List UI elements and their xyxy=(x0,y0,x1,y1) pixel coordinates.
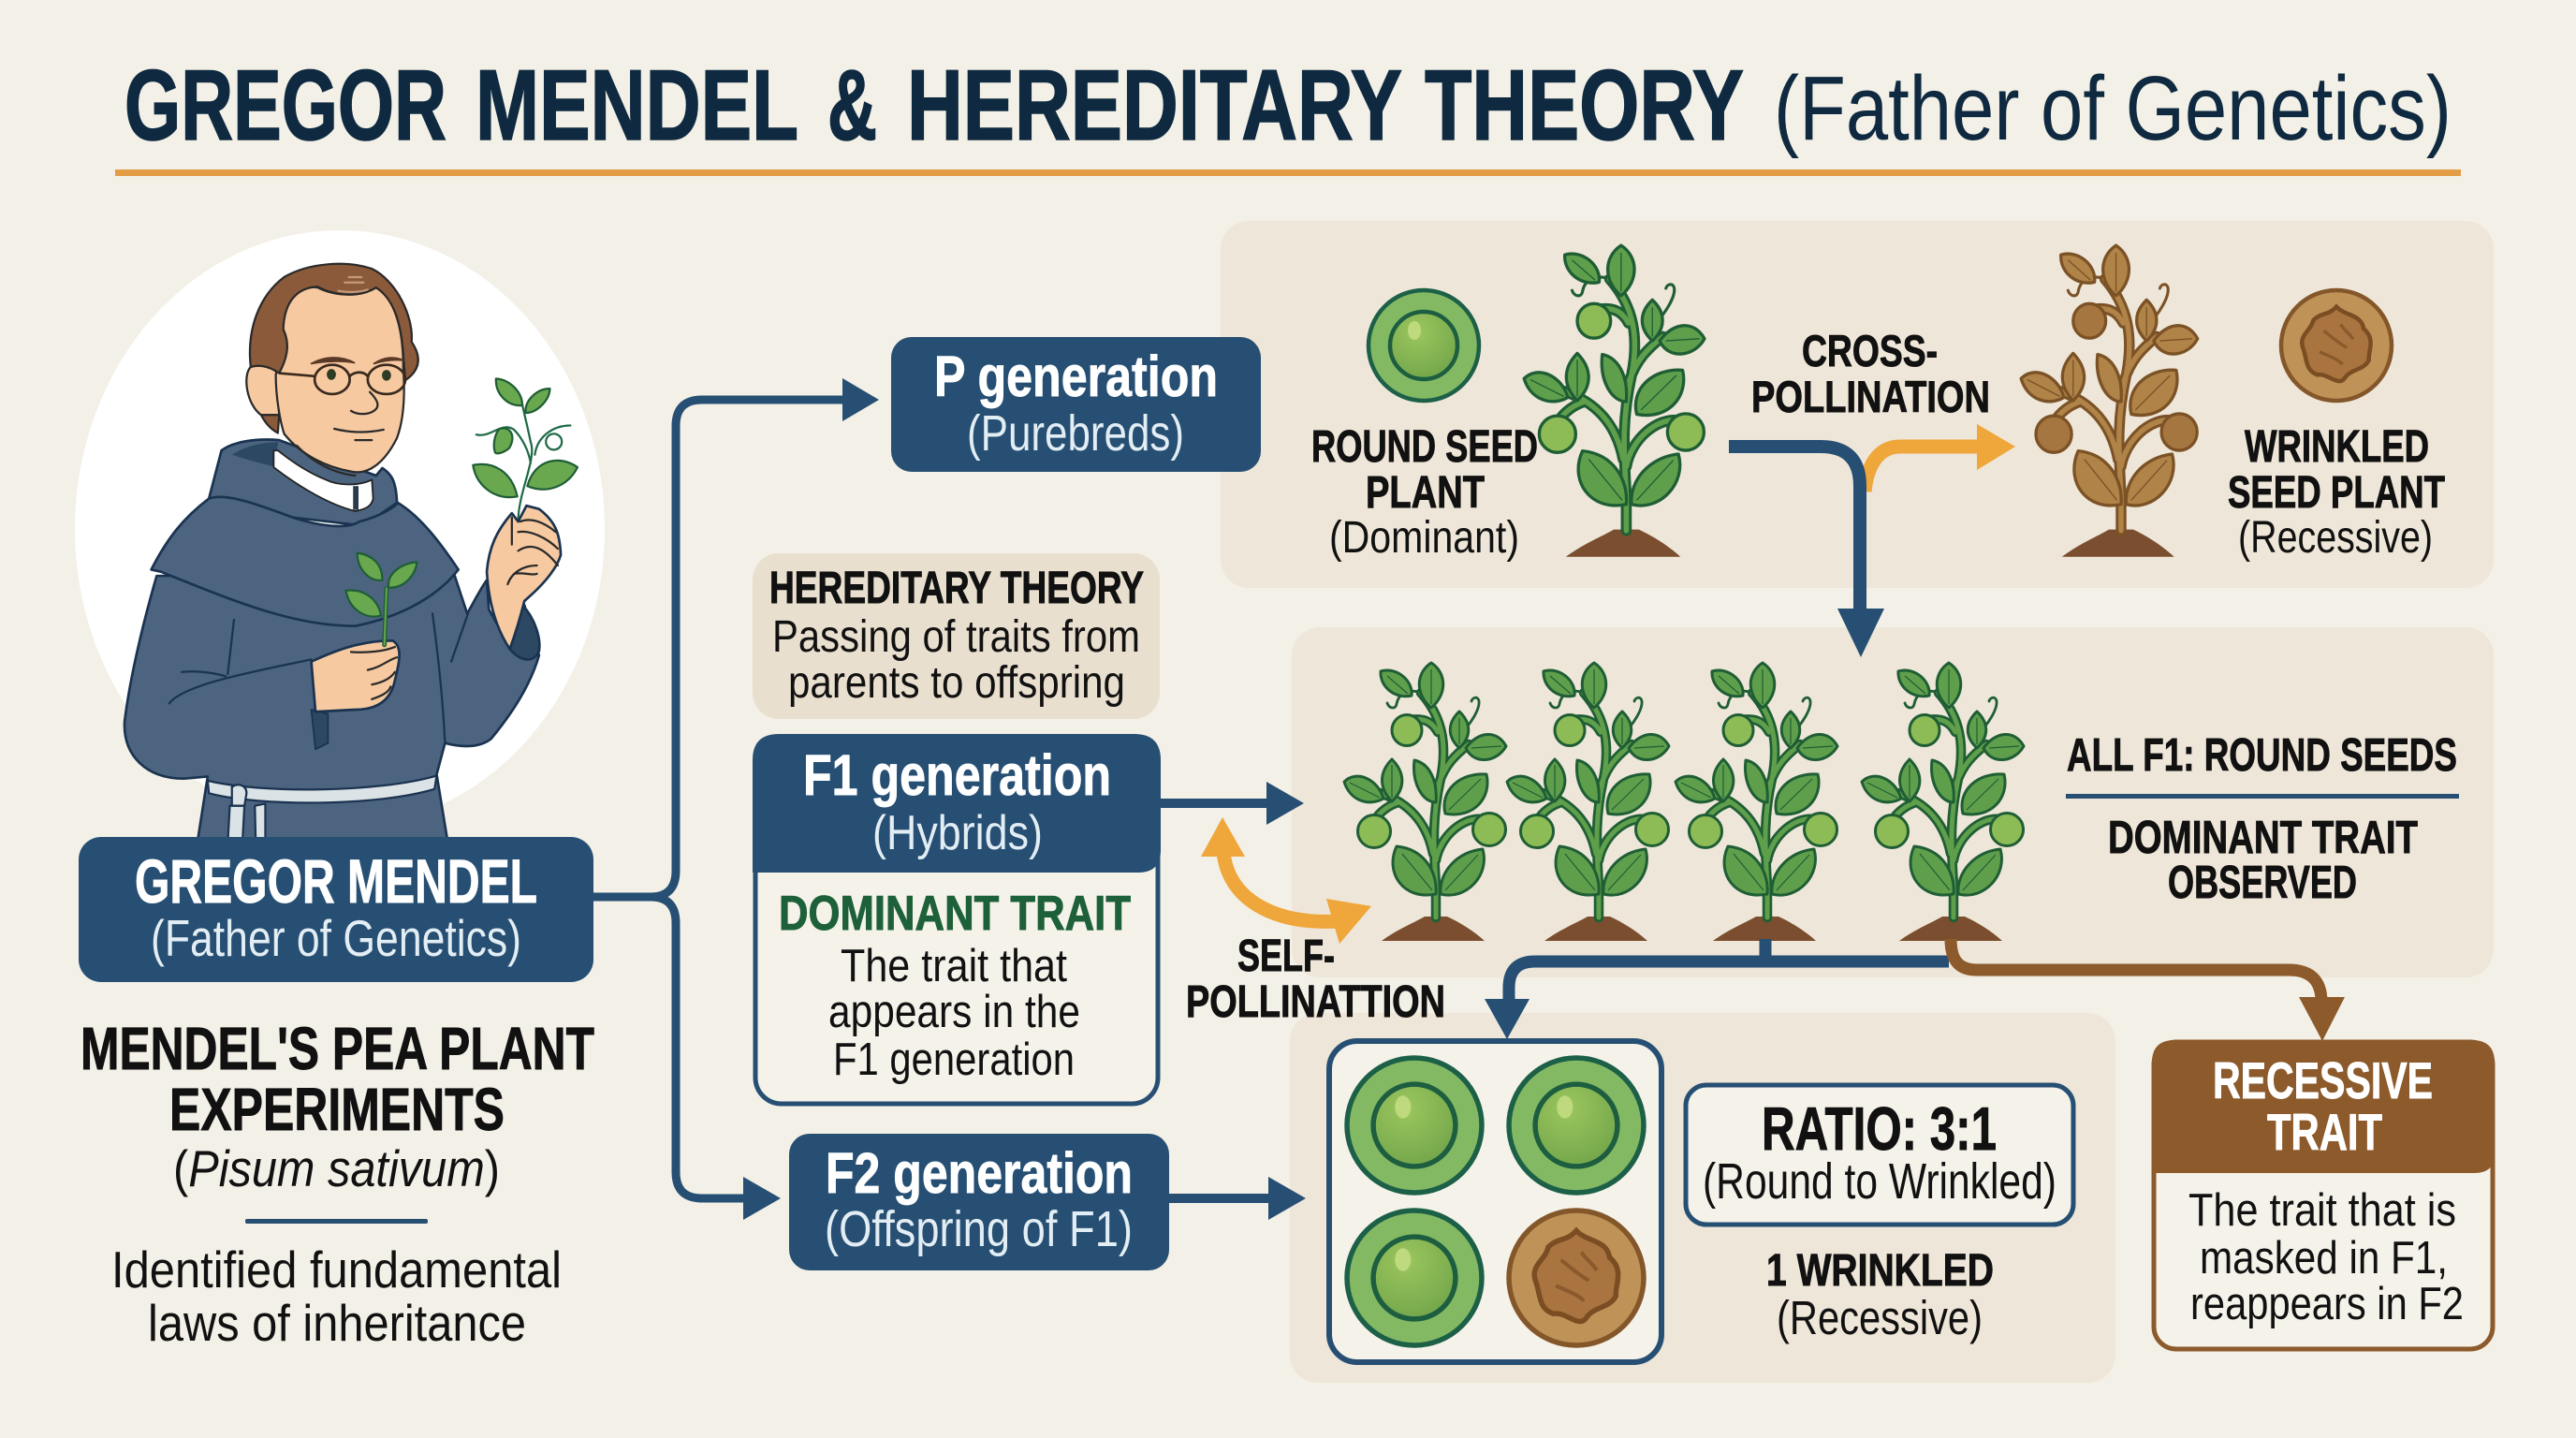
title: (Father of Genetics) xyxy=(1774,57,2452,159)
callout: hereditary theory: HEREDITARY THEORY xyxy=(769,564,1144,613)
icon: F1 plant 1 xyxy=(1344,663,1506,941)
label: cross-pollination xyxy=(1751,326,1990,421)
box: F2 generation: (Offspring of F1) xyxy=(825,1201,1133,1257)
seed grid xyxy=(1329,1041,1661,1362)
icon: F1 plant 2 xyxy=(1507,663,1669,941)
portrait: Gregor Mendel holding pea plants xyxy=(75,230,605,844)
box: F1 generation with dominant trait: The trait that xyxy=(841,941,1067,991)
lower hand xyxy=(312,640,400,712)
box: recessive trait: The trait that is xyxy=(2188,1185,2456,1236)
arrow: F2 generation to seed grid xyxy=(1169,1177,1306,1220)
text: fundamental laws: Identified fundamental xyxy=(111,1240,562,1299)
text: fundamental laws: laws of inheritance xyxy=(148,1294,526,1352)
arrow: cross-pollination orange branch xyxy=(1865,424,2015,492)
belt xyxy=(208,776,436,802)
box: F1 generation with dominant trait: (Hybrids) xyxy=(872,806,1043,860)
arrow: F1 generation to F1 plants xyxy=(1161,782,1304,825)
hair xyxy=(250,264,418,380)
icon: green pea plant xyxy=(1524,245,1705,557)
text: 1 wrinkled recessive: (Recessive) xyxy=(1777,1291,1983,1344)
box: F2 generation xyxy=(789,1134,1169,1270)
arrow: F1 plants to recessive trait xyxy=(1951,939,2345,1041)
label: cross-pollination: POLLINATION xyxy=(1751,372,1990,421)
panel: F1 plants xyxy=(1292,627,2494,977)
label: wrinkled seed plant xyxy=(2228,422,2445,563)
eyes xyxy=(327,369,336,380)
box: recessive trait: reappears in F2 xyxy=(2190,1279,2464,1329)
arrow: parents to F1 plants xyxy=(1729,447,1884,657)
panel: parental cross xyxy=(1221,221,2494,588)
name box: Gregor Mendel: (Father of Genetics) xyxy=(151,909,521,967)
box: F1 generation with dominant trait: F1 generation xyxy=(803,743,1111,807)
face xyxy=(276,287,404,472)
upper sprig xyxy=(473,378,578,521)
label: wrinkled seed plant: (Recessive) xyxy=(2238,513,2433,563)
label: wrinkled seed plant: SEED PLANT xyxy=(2228,468,2445,518)
icon: wrinkled seed xyxy=(1509,1211,1644,1345)
box: recessive trait xyxy=(2152,1040,2495,1349)
heading: pea plant experiments: (Pisum sativum) xyxy=(173,1139,500,1197)
label: self-pollination: POLLINATTION xyxy=(1186,977,1445,1027)
label: self-pollination xyxy=(1186,932,1445,1027)
label: round seed plant: (Dominant) xyxy=(1329,513,1519,563)
box: P generation xyxy=(891,337,1261,472)
upper hand xyxy=(487,506,561,649)
title underline xyxy=(115,169,2461,176)
heading: pea plant experiments xyxy=(80,1015,594,1197)
text: all F1 round seeds xyxy=(2066,730,2459,908)
glasses xyxy=(280,365,405,394)
title: MENDEL xyxy=(476,49,798,161)
icon: F1 plant 4 xyxy=(1862,663,2024,941)
ear xyxy=(246,366,279,415)
icon: brown pea plant xyxy=(2021,245,2198,557)
callout: hereditary theory: parents to offspring xyxy=(788,658,1125,708)
label: round seed plant xyxy=(1311,422,1538,563)
box: P generation: (Purebreds) xyxy=(967,405,1184,462)
text: all F1 round seeds: OBSERVED xyxy=(2168,858,2357,908)
box: recessive trait: RECESSIVE xyxy=(2213,1051,2433,1109)
box: F1 generation with dominant trait xyxy=(753,734,1161,1104)
title xyxy=(124,49,2452,161)
icon: round green seed xyxy=(1368,290,1479,401)
label: cross-pollination: CROSS- xyxy=(1802,326,1938,375)
text: all F1 round seeds: DOMINANT TRAIT xyxy=(2108,813,2418,863)
name box: Gregor Mendel xyxy=(79,837,593,982)
text: 1 wrinkled recessive xyxy=(1766,1246,1994,1344)
box: F2 generation: F2 generation xyxy=(826,1141,1133,1205)
ratio callout: (Round to Wrinkled) xyxy=(1703,1153,2056,1210)
title: & xyxy=(827,49,877,161)
brows xyxy=(312,358,403,363)
panel: F2 results xyxy=(1290,1013,2115,1383)
box: F1 generation with dominant trait: appears in the xyxy=(828,987,1080,1037)
arrow: F1 plants to seed grid xyxy=(1485,939,1949,1039)
box: recessive trait: masked in F1, xyxy=(2200,1233,2448,1284)
label: round seed plant: ROUND SEED xyxy=(1311,422,1538,472)
box: recessive trait: TRAIT xyxy=(2267,1103,2382,1161)
icon: wrinkled brown seed xyxy=(2281,290,2392,401)
icon: round seed 1 xyxy=(1347,1058,1482,1193)
label: round seed plant: PLANT xyxy=(1366,468,1485,518)
box: F1 generation with dominant trait: F1 generation xyxy=(833,1034,1075,1085)
label: self-pollination: SELF- xyxy=(1237,932,1335,981)
icon: round seed 2 xyxy=(1509,1058,1644,1193)
ratio callout xyxy=(1686,1085,2073,1225)
text: all F1 round seeds: ALL F1: ROUND SEEDS xyxy=(2067,730,2457,781)
text: fundamental laws xyxy=(111,1240,562,1352)
ratio callout: RATIO: 3:1 xyxy=(1762,1094,1997,1163)
name box: Gregor Mendel: GREGOR MENDEL xyxy=(135,846,537,916)
collar xyxy=(273,450,373,511)
heading: pea plant experiments: MENDEL'S PEA PLANT xyxy=(80,1015,594,1082)
text: 1 wrinkled recessive: 1 WRINKLED xyxy=(1766,1246,1994,1296)
title: HEREDITARY xyxy=(907,49,1402,161)
box: F1 generation with dominant trait: DOMINANT TRAIT xyxy=(779,887,1131,941)
callout: hereditary theory: Passing of traits from xyxy=(772,612,1140,662)
title: GREGOR xyxy=(124,49,446,161)
callout: hereditary theory xyxy=(753,553,1160,719)
icon: F1 plant 3 xyxy=(1676,663,1837,941)
upper arm sleeve xyxy=(510,605,539,659)
title: THEORY xyxy=(1425,49,1744,161)
arrow: bracket from Mendel to P and F2 generations xyxy=(593,378,879,1220)
box: P generation: P generation xyxy=(934,345,1218,408)
arrow: self-pollination curve xyxy=(1201,817,1371,944)
nose and mouth xyxy=(297,392,384,476)
heading: pea plant experiments: EXPERIMENTS xyxy=(169,1076,505,1143)
icon: round seed 3 xyxy=(1347,1211,1482,1345)
label: wrinkled seed plant: WRINKLED xyxy=(2245,422,2429,472)
lower sprig xyxy=(346,553,417,645)
